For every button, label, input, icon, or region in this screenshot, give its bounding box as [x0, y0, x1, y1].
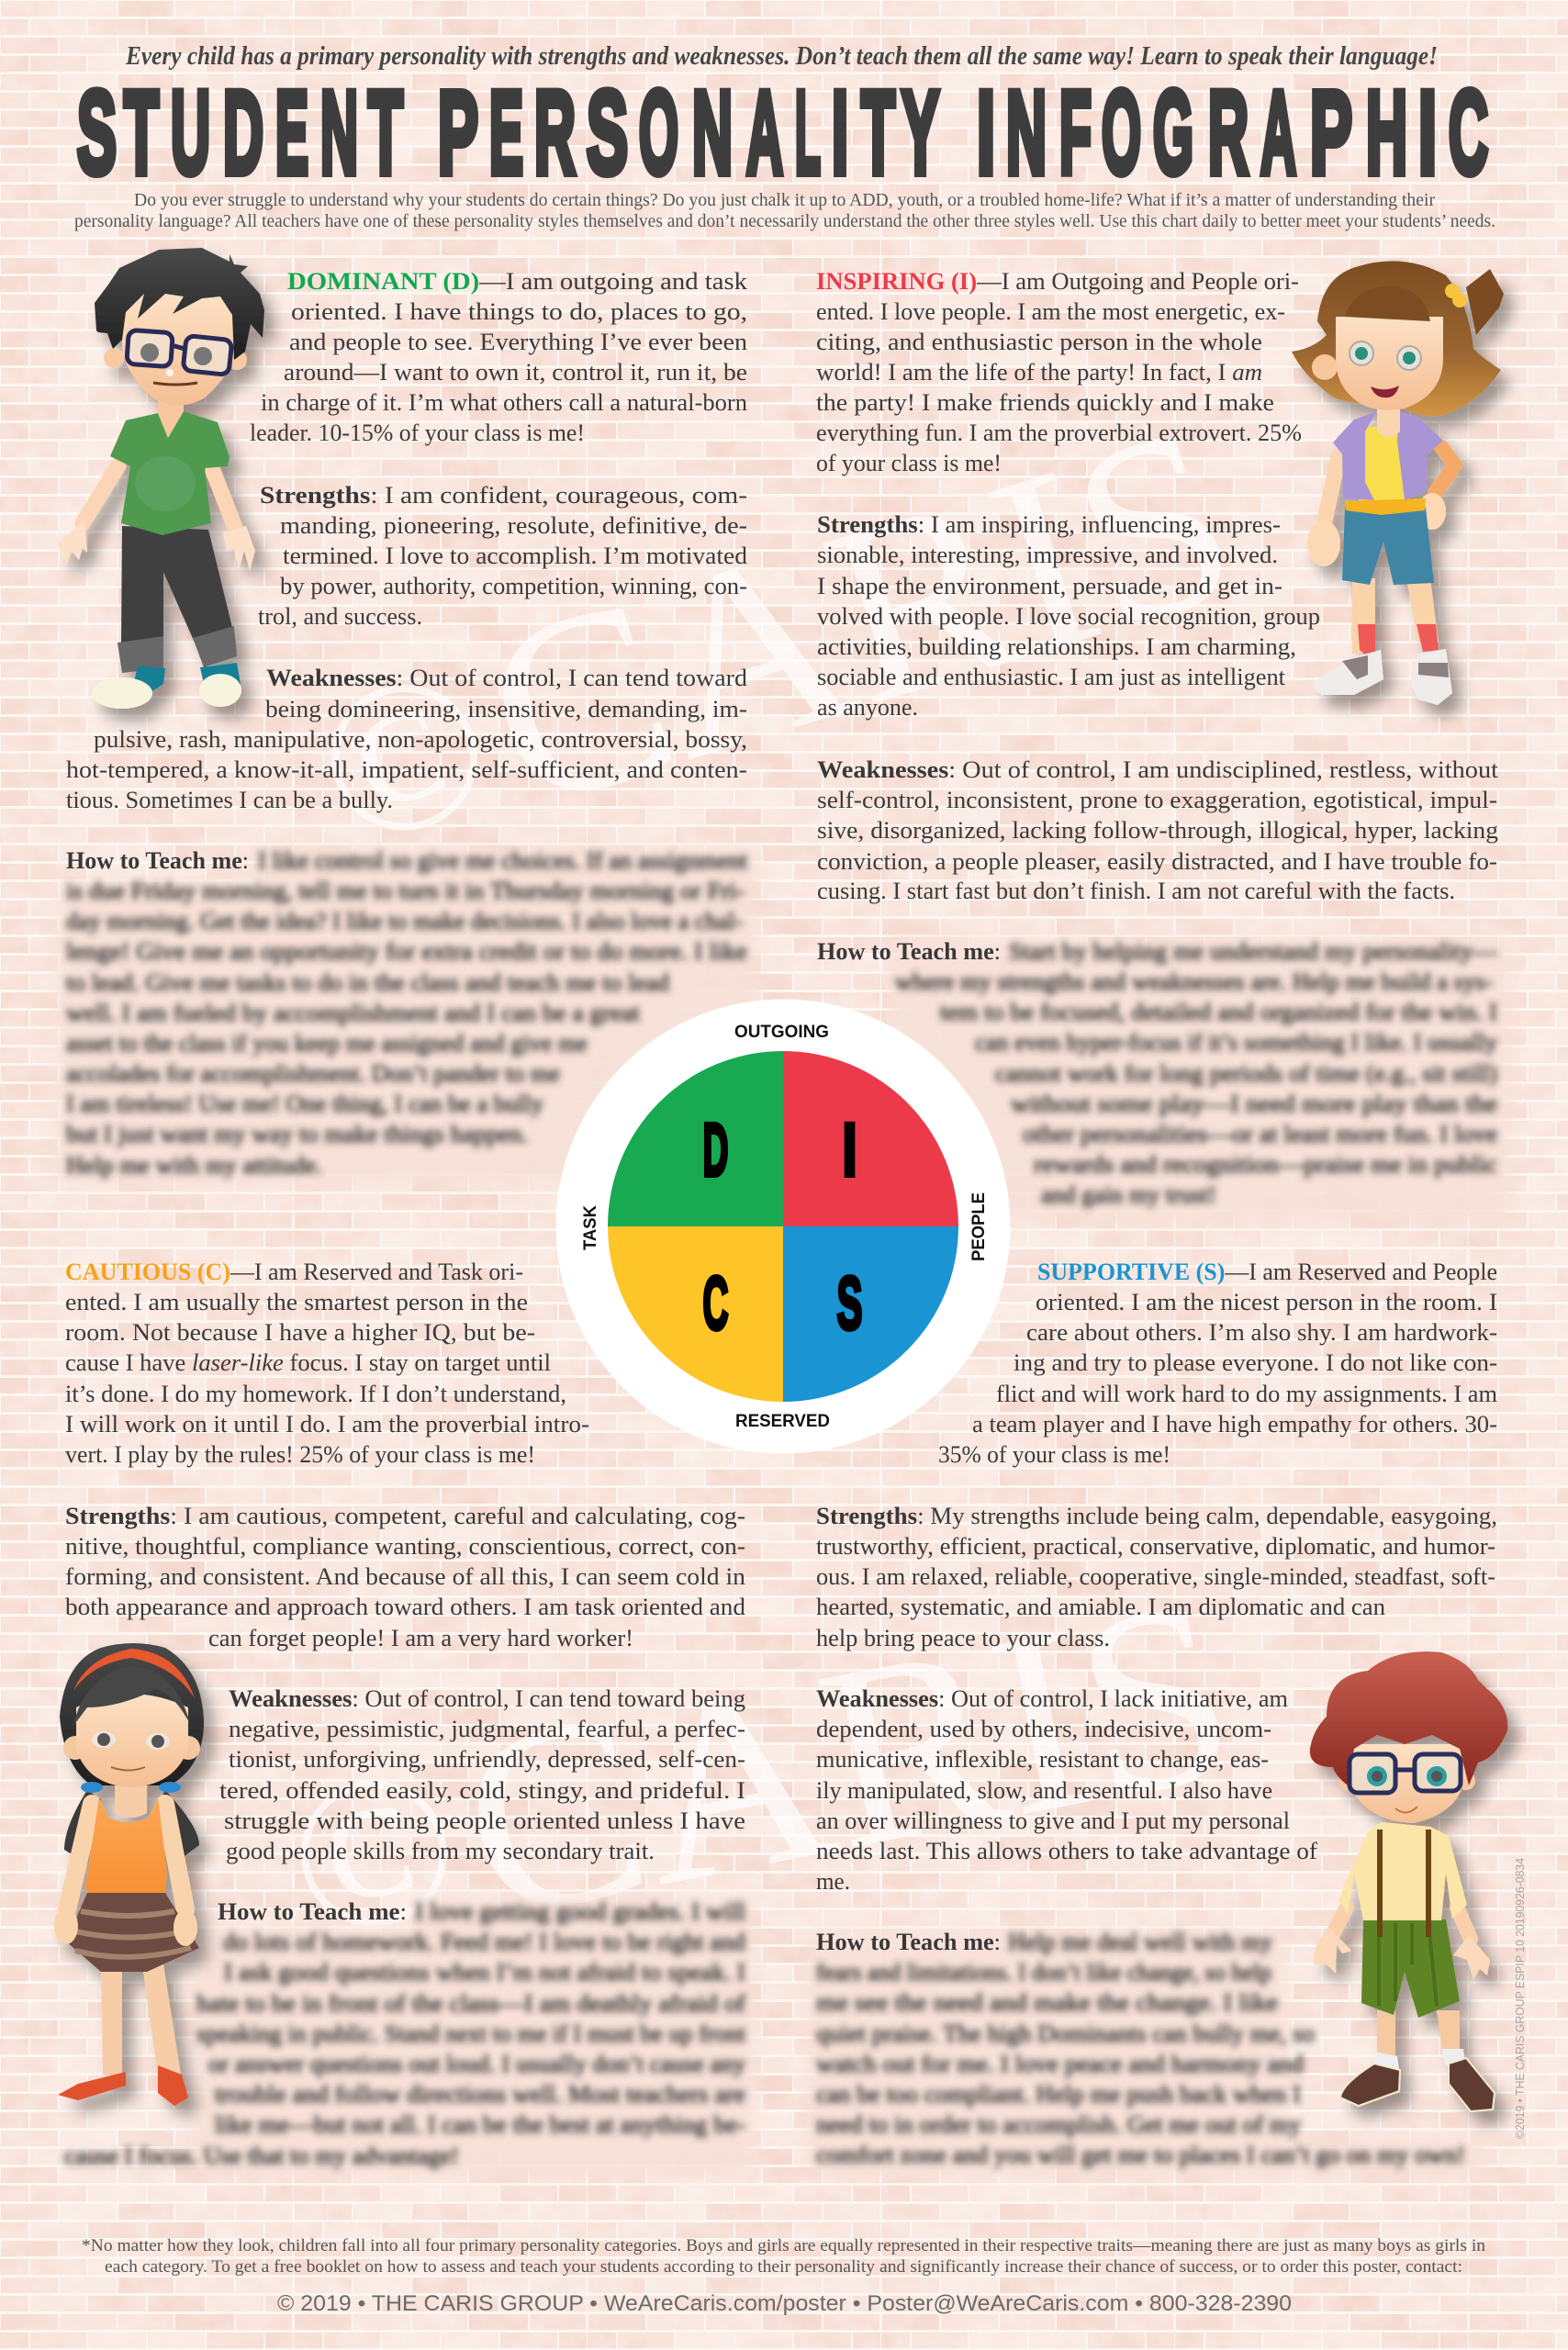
- inspiring strengths: as anyone.: [817, 693, 918, 721]
- cautious strengths: forming, and consistent. And because of all this, I can seem cold in: [65, 1562, 745, 1590]
- inspiring how to teach blurred text: where my strengths and weaknesses are. Help me build a sys-: [895, 968, 1493, 995]
- intro paragraph: [74, 190, 1495, 231]
- dominant weaknesses: pulsive, rash, manipulative, non-apologetic, controversial, bossy,: [94, 725, 747, 753]
- supportive description: flict and will work hard to do my assignments. I am: [996, 1380, 1497, 1407]
- title: E: [275, 68, 308, 198]
- inspiring how to teach blurred text: without some play—I need more play than the: [1011, 1090, 1497, 1117]
- footer contact line: © 2019 • THE CARIS GROUP • WeAreCaris.com/poster • Poster@WeAreCaris.com • 800-328-2390: [277, 2291, 1292, 2316]
- title: S: [587, 68, 628, 198]
- character: cautious girl: [54, 1643, 204, 2106]
- supportive weaknesses: Weaknesses: Out of control, I lack initiative, am: [816, 1684, 1288, 1712]
- cautious weaknesses: tionist, unforgiving, unfriendly, depressed, self-cen-: [229, 1745, 745, 1773]
- vertical copyright credit: ©2019 • THE CARIS GROUP ESPIP 10 20190926-0834: [1513, 1858, 1527, 2139]
- title: A: [1260, 68, 1296, 198]
- dominant strengths: Strengths : I am confident, courageous, com-: [260, 481, 747, 509]
- inspiring weaknesses: Weaknesses : Out of control, I am undisciplined, restless, without: [817, 755, 1499, 783]
- cautious how to teach blurred text: hate to be in front of the class—I am deathly afraid of: [196, 1989, 745, 2017]
- cautious how to teach blurred text: cause I focus. Use that to my advantage!: [64, 2142, 459, 2169]
- title: I: [977, 68, 995, 198]
- supportive weaknesses: [816, 1684, 1317, 1895]
- cautious strengths: [65, 1502, 745, 1651]
- character: inspiring girl: [1292, 261, 1504, 705]
- dominant description: DOMINANT (D) —I am outgoing and task: [287, 267, 748, 295]
- girl arms: [1325, 456, 1338, 520]
- cautious description: ented. I am usually the smartest person in the: [65, 1288, 528, 1315]
- dominant weaknesses: tious. Sometimes I can be a bully.: [66, 786, 393, 813]
- panel: inspiring: [816, 267, 1499, 1208]
- dominant how to teach blurred text: lenge! Give me an opportunity for extra credit or to do more. I like: [66, 937, 747, 965]
- dominant how to teach label: How to Teach me:: [66, 846, 249, 874]
- panel: dominant: [66, 267, 748, 1179]
- quadrant s: [783, 1226, 958, 1402]
- cautious how to teach blurred text: I love getting good grades. I will: [415, 1897, 745, 1925]
- supportive how to teach blurred text: fears and limitations. I don’t like change, so help: [816, 1958, 1271, 1986]
- footnote: [82, 2236, 1486, 2277]
- dominant weaknesses: [66, 664, 747, 813]
- inspiring weaknesses: self-control, inconsistent, prone to exaggeration, egotistical, impul-: [817, 786, 1497, 813]
- cautious how to teach blurred text: speaking in public. Stand next to me if I must be up front: [196, 2020, 746, 2047]
- dominant weaknesses: hot-tempered, a know-it-all, impatient, self-sufficient, and conten-: [66, 755, 747, 783]
- cautious strengths: nitive, thoughtful, compliance wanting, conscientious, correct, con-: [65, 1532, 745, 1560]
- dominant how to teach blurred text: I am tireless! Use me! One thing, I can be a bully: [66, 1090, 544, 1117]
- inspiring description: everything fun. I am the proverbial extrovert. 25%: [816, 419, 1302, 446]
- title: L: [795, 68, 821, 198]
- supportive strengths: hearted, systematic, and amiable. I am diplomatic and can: [816, 1593, 1385, 1620]
- girl shirt and jacket: [1359, 427, 1405, 500]
- supportive description: oriented. I am the nicest person in the room. I: [1036, 1288, 1497, 1315]
- disc letters: I: [843, 1109, 857, 1192]
- quadrant d: [608, 1051, 783, 1226]
- boy shorts: [1361, 1919, 1460, 2018]
- dominant description: around—I want to own it, control it, run it, be: [284, 358, 747, 386]
- dominant strengths: trol, and success.: [258, 602, 422, 630]
- intro paragraph: Do you ever struggle to understand why your students do certain things? Do you just chalk it up to ADD, youth, or a troubled home-life? What if it’s a matter of understanding their: [134, 190, 1435, 210]
- character: dominant boy: [58, 248, 264, 709]
- dominant how to teach blurred text: to lead. Give me tasks to do in the class and teach me to lead: [66, 968, 669, 996]
- cautious weaknesses: tered, offended easily, cold, stingy, and prideful. I: [219, 1776, 745, 1804]
- supportive weaknesses: ily manipulated, slow, and resentful. I also have: [816, 1776, 1272, 1804]
- supportive description: 35% of your class is me!: [938, 1440, 1170, 1468]
- title: I: [832, 68, 848, 198]
- inspiring strengths: activities, building relationships. I am charming,: [817, 632, 1296, 660]
- title: E: [489, 68, 523, 198]
- cautious weaknesses: Weaknesses: Out of control, I can tend toward being: [229, 1684, 745, 1712]
- girl legs and socks: [1352, 578, 1375, 654]
- boy shoes: [129, 666, 165, 707]
- supportive weaknesses: needs last. This allows others to take advantage of: [816, 1837, 1317, 1864]
- cautious how to teach blurred text: like me—but not all. I can be the best at anything be-: [215, 2110, 745, 2138]
- girl hair bow: [1445, 284, 1460, 298]
- dominant weaknesses: Weaknesses : Out of control, I can tend toward: [266, 664, 747, 691]
- inspiring how to teach label: How to Teach me:: [817, 937, 1001, 965]
- supportive strengths: Strengths: My strengths include being calm, dependable, easygoing,: [816, 1502, 1497, 1529]
- girl arms: [67, 1804, 92, 1909]
- title: S: [77, 68, 117, 198]
- girl shoes: [1314, 650, 1383, 695]
- quadrant i: [783, 1051, 958, 1226]
- boy shirt: [1338, 1822, 1467, 1920]
- panel: supportive: [816, 1258, 1497, 2168]
- supportive weaknesses: municative, inflexible, resistant to change, eas-: [816, 1745, 1269, 1773]
- supportive strengths: ous. I am relaxed, reliable, cooperative, single-minded, steadfast, soft-: [816, 1562, 1495, 1590]
- cautious how to teach label: How to Teach me:: [218, 1897, 407, 1925]
- boy glasses: [1350, 1754, 1461, 1793]
- dominant how to teach blurred text: but I just want my way to make things happen.: [66, 1120, 528, 1147]
- cautious description: it’s done. I do my homework. If I don’t understand,: [65, 1380, 566, 1407]
- cautious how to teach blurred text: or answer questions out loud. I usually don’t cause any: [208, 2050, 746, 2077]
- supportive how to teach label: How to Teach me:: [816, 1928, 1001, 1955]
- cautious weaknesses: struggle with being people oriented unless I have: [224, 1807, 745, 1834]
- dominant how to teach blurred text: [66, 846, 748, 1179]
- disc letters: C: [703, 1261, 729, 1346]
- inspiring strengths: I shape the environment, persuade, and get in-: [817, 572, 1282, 599]
- cautious weaknesses: good people skills from my secondary trait.: [226, 1837, 655, 1864]
- title: A: [746, 68, 783, 198]
- cautious description: [65, 1258, 589, 1468]
- girl head and hair: [60, 1643, 204, 1785]
- dominant description: in charge of it. I’m what others call a natural-born: [261, 388, 747, 416]
- axis labels: [580, 1022, 989, 1431]
- supportive description: care about others. I’m also shy. I am hardwork-: [1026, 1318, 1497, 1346]
- inspiring weaknesses: conviction, a people pleaser, easily distracted, and I have trouble fo-: [817, 847, 1497, 875]
- cautious description: I will work on it until I do. I am the proverbial intro-: [65, 1410, 589, 1438]
- dominant strengths: termined. I love to accomplish. I’m motivated: [283, 542, 747, 569]
- boy head: [1338, 1772, 1357, 1790]
- inspiring description: world! I am the life of the party! In fact, I am: [816, 358, 1262, 386]
- girl braids: [64, 1790, 101, 1863]
- axis labels: TASK: [580, 1205, 600, 1250]
- boy shoes: [1340, 2064, 1400, 2106]
- title: N: [692, 68, 733, 198]
- disc letters: [703, 1109, 863, 1346]
- boy arms: [1328, 1908, 1347, 1942]
- dominant how to teach blurred text: day morning. Get the idea? I like to make decisions. I also love a chal-: [66, 907, 743, 934]
- dominant strengths: [258, 481, 747, 630]
- inspiring description: of your class is me!: [816, 449, 1002, 476]
- inspiring weaknesses: cusing. I start fast but don’t finish. I am not careful with the facts.: [817, 877, 1455, 904]
- cautious description: vert. I play by the rules! 25% of your class is me!: [65, 1440, 535, 1468]
- title: T: [861, 68, 895, 198]
- cautious strengths: both appearance and approach toward others. I am task oriented and: [65, 1593, 745, 1620]
- title: H: [1366, 68, 1407, 198]
- inspiring how to teach blurred text: Start by helping me understand my personality—: [1009, 937, 1498, 965]
- girl face: [92, 1731, 116, 1748]
- dominant weaknesses: being domineering, insensitive, demanding, im-: [265, 695, 747, 722]
- boy head: [104, 348, 124, 368]
- supportive how to teach blurred text: [816, 1928, 1465, 2168]
- title: O: [1102, 68, 1141, 198]
- axis labels: PEOPLE: [969, 1192, 989, 1261]
- supportive strengths: [816, 1502, 1497, 1651]
- cautious how to teach blurred text: trouble and follow directions well. Most teachers are: [215, 2080, 745, 2108]
- girl tank top: [85, 1797, 167, 1906]
- inspiring description: ented. I love people. I am the most energetic, ex-: [816, 297, 1285, 325]
- supportive how to teach blurred text: me see the need and make the change. I like: [816, 1988, 1278, 2016]
- girl legs: [101, 1964, 122, 2075]
- cautious how to teach blurred text: [64, 1897, 746, 2169]
- boy hair: [1310, 1651, 1507, 1785]
- inspiring strengths: sociable and enthusiastic. I am just as intelligent: [817, 663, 1286, 690]
- cautious description: room. Not because I have a higher IQ, but be-: [65, 1318, 535, 1346]
- inspiring weaknesses: [817, 755, 1499, 904]
- inspiring strengths: Strengths: I am inspiring, influencing, impres-: [817, 510, 1281, 538]
- inspiring description: [816, 267, 1302, 476]
- title: T: [368, 68, 403, 198]
- inspiring strengths: sionable, interesting, impressive, and involved.: [817, 541, 1278, 568]
- title: P: [438, 68, 478, 198]
- supportive weaknesses: me.: [816, 1867, 850, 1895]
- cautious weaknesses: negative, pessimistic, judgmental, fearful, a perfec-: [229, 1715, 745, 1742]
- quadrant c: [608, 1226, 783, 1402]
- watermark: bottom caris logo: ©: [270, 1719, 476, 1985]
- dominant how to teach blurred text: I like control so give me choices. If an assignment: [258, 846, 748, 874]
- cautious description: cause I have laser-like focus. I stay on target until: [65, 1348, 551, 1376]
- title: F: [1059, 68, 1092, 198]
- inspiring how to teach blurred text: [895, 937, 1498, 1208]
- inspiring strengths: [817, 510, 1320, 721]
- boy trousers: [121, 526, 236, 645]
- supportive how to teach blurred text: need to in order to accomplish. Get me out of my: [816, 2110, 1302, 2138]
- boy socks: [1374, 2052, 1399, 2070]
- title: R: [534, 68, 576, 198]
- cautious weaknesses: [219, 1684, 745, 1864]
- supportive weaknesses: dependent, used by others, indecisive, uncom-: [816, 1715, 1271, 1742]
- tagline: Every child has a primary personality with strengths and weaknesses. Don’t teach them all the same way! Learn to speak their language!: [125, 42, 1438, 71]
- title: I: [1418, 68, 1437, 198]
- character: supportive boy: [1310, 1651, 1507, 2111]
- boy glasses: [127, 330, 232, 375]
- supportive weaknesses: an over willingness to give and I put my personal: [816, 1807, 1290, 1834]
- girl eyes and mouth: [1350, 341, 1373, 365]
- inspiring description: the party! I make friends quickly and I make: [816, 388, 1274, 416]
- title: D: [223, 68, 263, 198]
- inspiring weaknesses: sive, disorganized, lacking follow-through, illogical, hyper, lacking: [817, 816, 1498, 844]
- title: T: [124, 68, 159, 198]
- inspiring description: citing, and enthusiastic person in the whole: [816, 328, 1262, 355]
- dominant how to teach blurred text: accolades for accomplishment. Don’t pander to me: [66, 1059, 560, 1087]
- watermark: top caris logo: ©: [291, 618, 517, 894]
- supportive strengths: trustworthy, efficient, practical, conservative, diplomatic, and humor-: [816, 1532, 1495, 1560]
- title: Y: [902, 68, 939, 198]
- supportive strengths: help bring peace to your class.: [816, 1624, 1110, 1651]
- dominant how to teach blurred text: Help me with my attitude.: [66, 1151, 322, 1179]
- dominant description: and people to see. Everything I’ve ever been: [289, 328, 747, 355]
- cautious strengths: can forget people! I am a very hard worker!: [208, 1624, 633, 1651]
- supportive how to teach blurred text: quiet praise. The high Dominants can bully me, so: [816, 2020, 1315, 2047]
- boy hair: [95, 248, 264, 360]
- girl flats: [58, 2072, 126, 2100]
- disc letters: S: [837, 1261, 863, 1346]
- disc chart: [556, 999, 1010, 1454]
- supportive description: [938, 1258, 1497, 1468]
- footnote: *No matter how they look, children fall into all four primary personality categories. Boys and girls are equally represented in their respective traits—meaning there are just as many boys as girls in: [82, 2236, 1486, 2255]
- inspiring strengths: volved with people. I love social recognition, group: [817, 602, 1320, 630]
- dominant description: oriented. I have things to do, places to go,: [291, 297, 747, 325]
- inspiring how to teach blurred text: and gain my trust!: [1041, 1181, 1216, 1208]
- supportive how to teach blurred text: watch out for me. I love peace and harmony and: [816, 2050, 1304, 2077]
- title: G: [1153, 68, 1193, 198]
- watermark: bottom caris logo: CARIS: [442, 1542, 1254, 1975]
- supportive how to teach blurred text: comfort zone and you will get me to places I can’t go on my own!: [816, 2141, 1465, 2168]
- dominant strengths: by power, authority, competition, winning, con-: [280, 572, 747, 599]
- title: [77, 68, 1488, 198]
- girl skirt: [66, 1893, 199, 1972]
- text: C: [1449, 68, 1488, 198]
- inspiring how to teach blurred text: cannot work for long periods of time (e.g., sit still): [995, 1059, 1497, 1087]
- supportive description: SUPPORTIVE (S)—I am Reserved and People: [1037, 1258, 1497, 1285]
- axis labels: OUTGOING: [734, 1022, 829, 1042]
- panel: cautious: [64, 1258, 746, 2169]
- dominant how to teach blurred text: is due Friday morning, tell me to turn it in Thursday morning or Fri-: [66, 877, 745, 904]
- title: N: [1006, 68, 1047, 198]
- intro paragraph: personality language? All teachers have one of these personality styles themselves and don’t necessarily understand the other three styles well. Use this chart daily to better meet your students’ needs.: [74, 211, 1495, 231]
- inspiring description: INSPIRING (I)—I am Outgoing and People ori-: [816, 267, 1299, 295]
- cautious strengths: Strengths: I am cautious, competent, careful and calculating, cog-: [65, 1502, 745, 1529]
- supportive how to teach blurred text: can be too compliant. Help me push back when I: [816, 2080, 1301, 2108]
- girl head: [1377, 404, 1400, 437]
- dominant strengths: manding, pioneering, resolute, definitive, de-: [280, 511, 747, 539]
- title: R: [1208, 68, 1249, 198]
- title: O: [639, 68, 678, 198]
- inspiring how to teach blurred text: tem to be focused, detailed and organized for the win. I: [940, 998, 1497, 1025]
- inspiring how to teach blurred text: can even hyper-focus if it’s something I like. I usually: [975, 1028, 1498, 1056]
- title: P: [1310, 68, 1352, 198]
- cautious description: CAUTIOUS (C)—I am Reserved and Task ori-: [65, 1258, 523, 1285]
- boy arms: [83, 465, 118, 523]
- blurred panel backdrops: [57, 849, 1510, 2176]
- disc letters: D: [703, 1109, 729, 1192]
- boy shirt: [110, 411, 230, 535]
- dominant how to teach blurred text: asset to the class if you keep me assigned and give me: [66, 1029, 588, 1057]
- inspiring how to teach blurred text: other personalities—or at least more fun. I love: [1023, 1120, 1497, 1147]
- footnote: each category. To get a free booklet on how to assess and teach your students according to their personality and significantly increase their chance of success, or to order this poster, contact:: [105, 2257, 1462, 2277]
- girl hair ties: [81, 1782, 103, 1793]
- supportive how to teach blurred text: Help me deal well with my: [1008, 1928, 1273, 1955]
- supportive description: a team player and I have high empathy for others. 30-: [972, 1410, 1497, 1438]
- dominant description: leader. 10-15% of your class is me!: [250, 419, 585, 446]
- supportive description: ing and try to please everyone. I do not like con-: [1014, 1348, 1497, 1376]
- axis labels: RESERVED: [735, 1411, 830, 1431]
- dominant description: [250, 267, 748, 446]
- dominant how to teach blurred text: well. I am fueled by accomplishment and I can be a great: [66, 999, 641, 1026]
- title: N: [320, 68, 358, 198]
- boy suspenders: [1377, 1830, 1383, 1937]
- inspiring how to teach blurred text: rewards and recognition—praise me in public: [1034, 1150, 1497, 1178]
- title: U: [171, 68, 210, 198]
- girl shorts: [1342, 508, 1434, 585]
- boy legs: [1377, 2010, 1395, 2061]
- cautious how to teach blurred text: I ask good questions when I’m not afraid to speak. I: [224, 1958, 745, 1986]
- cautious how to teach blurred text: do lots of homework. Feed me! I love to be right and: [223, 1928, 745, 1955]
- watermark: top caris logo: CARIS: [456, 370, 1263, 864]
